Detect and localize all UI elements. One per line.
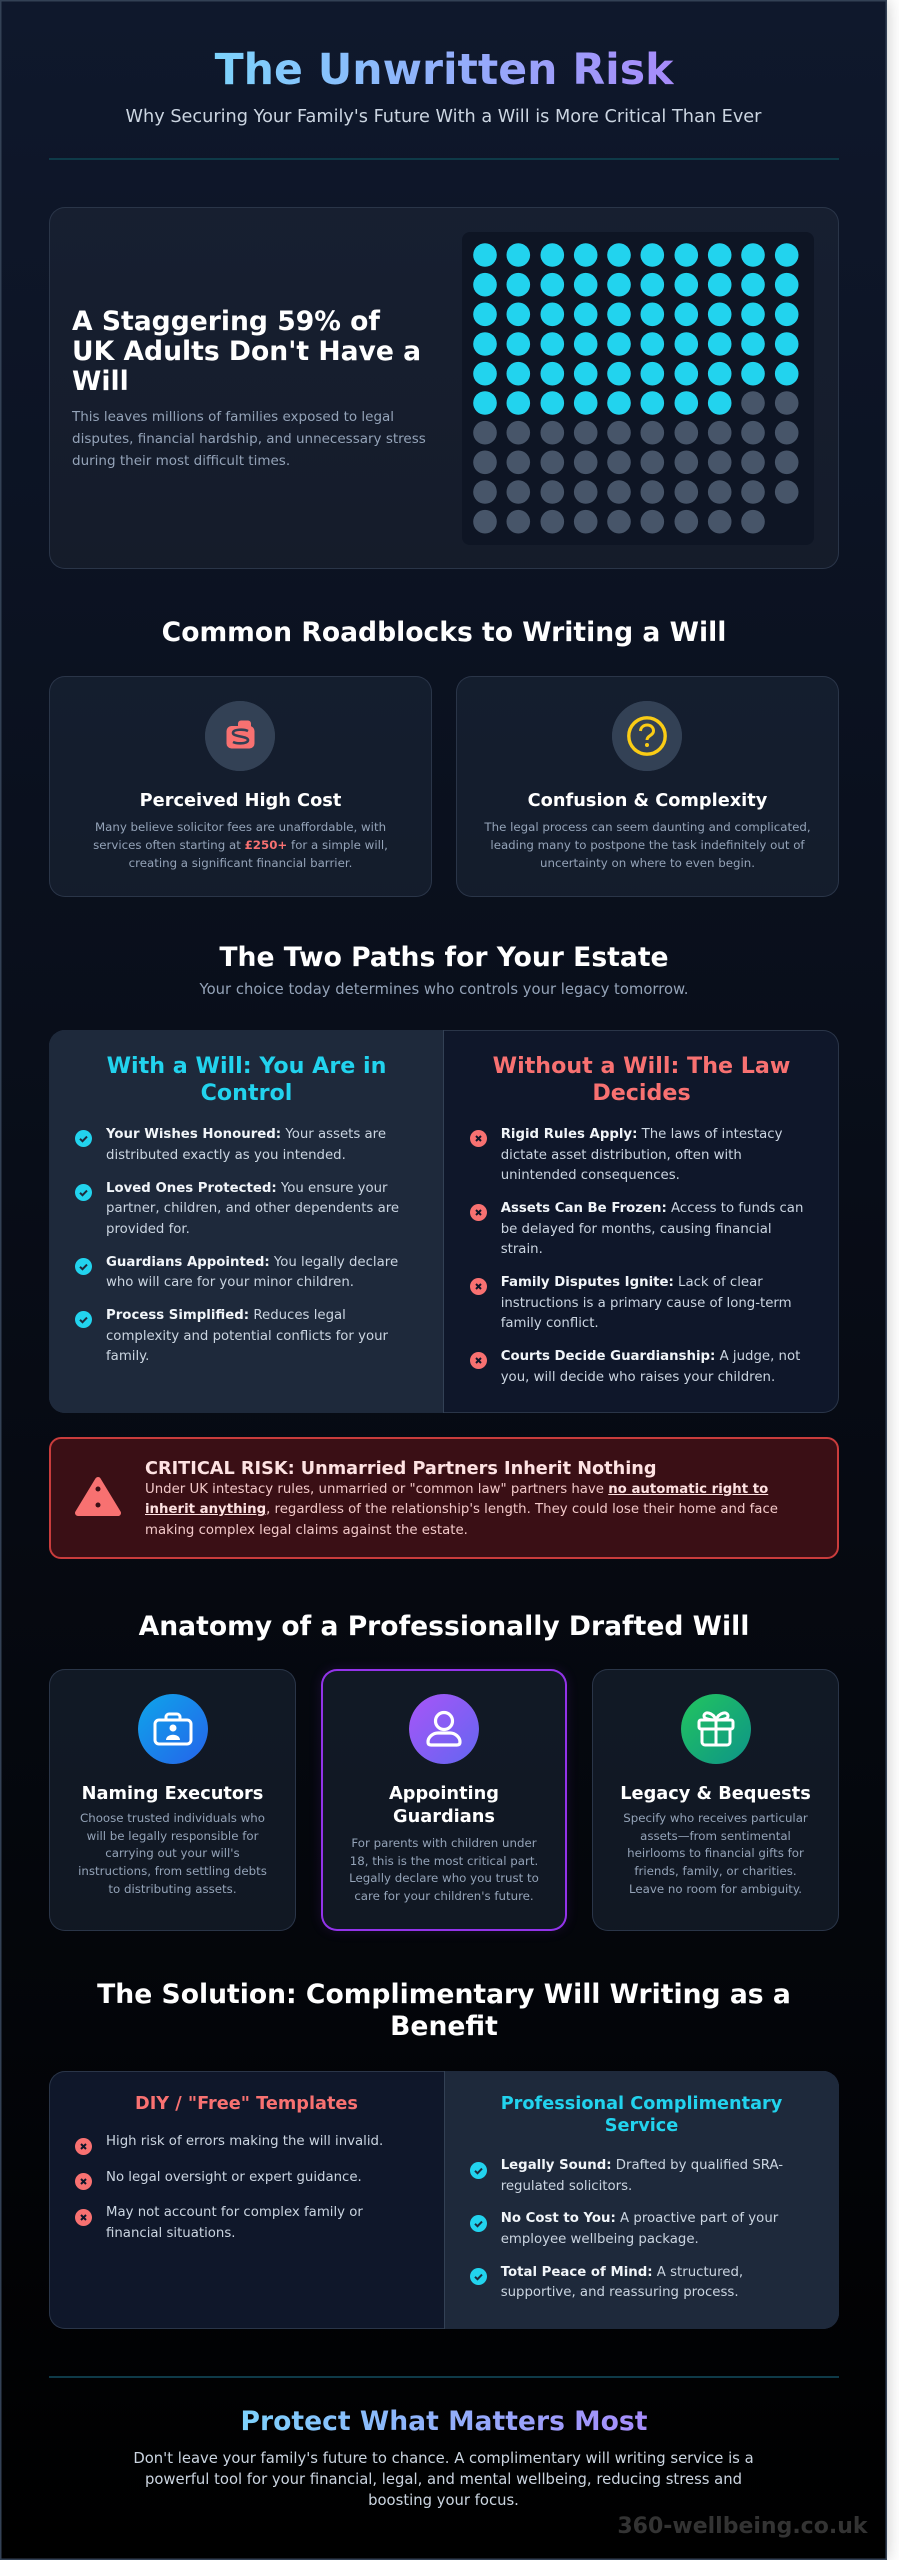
item: process simplified: complexity and potential conflicts for your — [106, 1329, 388, 1344]
card text — [349, 1836, 539, 1903]
card text: Specify who receives particular — [623, 1811, 808, 1825]
item: process simplified — [106, 1308, 388, 1364]
column: DIY templates — [75, 2094, 383, 2241]
item: family disputes: family conflict. — [501, 1316, 599, 1331]
item: family disputes — [501, 1275, 792, 1331]
statistic heading: UK Adults Don't Have a — [72, 336, 421, 366]
callout text: making complex legal claims against the estate. — [145, 1523, 468, 1538]
callout text: Under UK intestacy rules, unmarried or "common law" partners have no automatic right to — [145, 1482, 768, 1496]
item: assets frozen: strain. — [501, 1242, 543, 1257]
item: process simplified: family. — [106, 1349, 149, 1364]
card text: assets—from sentimental — [640, 1829, 791, 1843]
heading: the solution: Benefit — [390, 2011, 498, 2042]
column: with a will — [49, 1030, 444, 1413]
icon: check — [75, 1184, 92, 1201]
statistic heading: A Staggering 59% of — [72, 306, 380, 336]
column heading: Professional Complimentary — [501, 2094, 782, 2114]
item: complex situations: May not account for complex family or — [106, 2205, 363, 2220]
icon: cross — [470, 1130, 487, 1147]
heading: the solution — [97, 1979, 791, 2042]
footer heading: Protect What Matters Most — [241, 2406, 647, 2437]
item: peace of mind — [501, 2263, 743, 2304]
item: assets frozen: be delayed for months, causing financial — [501, 1222, 772, 1237]
card title: Naming Executors — [82, 1784, 263, 1804]
card text — [623, 1811, 808, 1896]
icon: check — [470, 2162, 487, 2179]
card title: Perceived High Cost — [140, 791, 341, 811]
footer text — [0, 2449, 887, 2512]
column heading: Control — [201, 1080, 292, 1106]
card text: care for your children's future. — [354, 1889, 534, 1903]
footer text: Don't leave your family's future to chance. A complimentary will writing service is a — [133, 2450, 754, 2467]
card text: Choose trusted individuals who — [80, 1811, 265, 1825]
statistic description: This leaves millions of families exposed to legal — [72, 409, 394, 425]
item: assets frozen — [500, 1201, 803, 1257]
callout heading: CRITICAL RISK: Unmarried Partners Inherit Nothing — [145, 1458, 657, 1478]
heading: two paths: The Two Paths for Your Estate — [219, 942, 669, 973]
card text: to distributing assets. — [108, 1882, 237, 1896]
heading: the solution: The Solution: Complimentary Will Writing as a — [97, 1979, 791, 2010]
item: complex situations — [106, 2205, 363, 2241]
icon: cross — [75, 2209, 92, 2226]
panel: naming executors — [49, 1669, 296, 1931]
icon: check — [470, 2215, 487, 2232]
chart: dot grid of 59 in 100 — [462, 232, 814, 534]
statistic description — [72, 409, 426, 469]
card title: Guardians — [393, 1806, 495, 1826]
card text: uncertainty on where to even begin. — [540, 856, 755, 870]
column heading — [107, 1053, 386, 1106]
panel: legacy and bequests — [592, 1669, 839, 1931]
item: family disputes: Family Disputes Ignite: Lack of clear — [501, 1275, 763, 1290]
item: no cost — [501, 2211, 778, 2247]
statistic description: during their most difficult times. — [72, 453, 290, 469]
card text: instructions, from settling debts — [78, 1864, 267, 1878]
panel: perceived high cost — [49, 676, 432, 897]
item: no cost: employee wellbeing package. — [501, 2232, 699, 2247]
item: loved ones protected: provided for. — [106, 1222, 190, 1237]
card text: Legally declare who you trust to — [349, 1871, 539, 1885]
statistic description: disputes, financial hardship, and unnecessary stress — [72, 431, 426, 447]
item: loved ones protected: Loved Ones Protected: You ensure your — [106, 1180, 388, 1196]
column heading: Service — [605, 2116, 678, 2136]
column heading — [501, 2094, 782, 2136]
card text — [93, 820, 388, 870]
icon: check — [75, 1311, 92, 1328]
item: wishes honoured — [106, 1127, 386, 1163]
panel: 59% statistic — [49, 207, 839, 569]
callout text — [145, 1482, 778, 1538]
card text: Leave no room for ambiguity. — [629, 1882, 802, 1896]
icon: gift — [680, 1694, 750, 1764]
item: loved ones protected — [106, 1180, 399, 1237]
card text: For parents with children under — [351, 1836, 537, 1850]
footer text: boosting your focus. — [368, 2492, 519, 2509]
footer text: powerful tool for your financial, legal, and mental wellbeing, reducing stress and — [145, 2471, 742, 2488]
item: peace of mind: supportive, and reassuring process. — [501, 2285, 739, 2300]
item: high risk: High risk of errors making the will invalid. — [106, 2134, 383, 2149]
card text: leading many to postpone the task indefinitely out of — [490, 838, 805, 852]
column: professional service — [444, 2071, 839, 2329]
card text: The legal process can seem daunting and complicated, — [484, 820, 811, 834]
panel: appointing guardians — [321, 1669, 567, 1931]
item: guardians appointed — [106, 1254, 398, 1290]
item: courts decide: you, will decide who raises your children. — [501, 1370, 775, 1385]
icon: money jar — [205, 701, 275, 771]
column: without a will — [470, 1053, 803, 1385]
icon: cross — [75, 2173, 92, 2190]
card text — [484, 820, 811, 870]
statistic heading: Will — [72, 366, 129, 396]
card title — [389, 1784, 499, 1826]
item: courts decide — [501, 1349, 800, 1385]
watermark: 360-wellbeing.co.uk — [617, 2514, 868, 2539]
item: no cost: No Cost to You: A proactive part of your — [501, 2211, 778, 2226]
icon: question mark — [612, 701, 682, 771]
item: rigid rules: Rigid Rules Apply: The laws of intestacy — [501, 1127, 782, 1142]
item: legally sound: regulated solicitors. — [501, 2179, 632, 2194]
card title: Legacy & Bequests — [620, 1784, 811, 1804]
card text: Many believe solicitor fees are unaffordable, with — [95, 820, 386, 834]
item: wishes honoured: distributed exactly as you intended. — [106, 1148, 346, 1163]
icon: check — [75, 1258, 92, 1275]
item: rigid rules — [501, 1127, 782, 1183]
item: no oversight: No legal oversight or expert guidance. — [106, 2170, 362, 2185]
card text: services often starting at £250+ for a simple will, — [93, 838, 388, 852]
icon: warning triangle — [75, 1477, 121, 1516]
item: rigid rules: dictate asset distribution, often with — [501, 1148, 742, 1163]
icon: cross — [470, 1204, 487, 1221]
icon: cross — [470, 1278, 487, 1295]
item: process simplified: Process Simplified: Reduces legal — [106, 1308, 346, 1323]
item: rigid rules: unintended consequences. — [501, 1168, 680, 1183]
card text: heirlooms to financial gifts for — [627, 1846, 804, 1860]
column heading: DIY / "Free" Templates — [135, 2094, 358, 2114]
card text: carrying out your will's — [105, 1846, 240, 1860]
card title: Confusion & Complexity — [528, 791, 767, 811]
subheading: two paths: Your choice today determines who controls your legacy tomorrow. — [200, 981, 688, 998]
column heading: Decides — [592, 1080, 691, 1106]
item: loved ones protected: partner, children, and other dependents are — [106, 1201, 399, 1216]
panel: DIY vs professional service — [49, 2071, 839, 2329]
heading: anatomy: Anatomy of a Professionally Drafted Will — [139, 1611, 749, 1642]
card text: friends, family, or charities. — [634, 1864, 797, 1878]
statistic heading — [72, 306, 421, 396]
item: guardians appointed: who will care for your minor children. — [106, 1275, 354, 1290]
header subtitle: Why Securing Your Family's Future With a Will is More Critical Than Ever — [126, 107, 761, 127]
card text: 18, this is the most critical part. — [350, 1854, 538, 1868]
item: legally sound — [501, 2158, 783, 2194]
item: peace of mind: Total Peace of Mind: A structured, — [501, 2265, 743, 2280]
item: legally sound: Legally Sound: Drafted by qualified SRA- — [501, 2158, 783, 2173]
callout: critical risk — [49, 1437, 839, 1559]
item: guardians appointed: Guardians Appointed: You legally declare — [106, 1254, 398, 1270]
item: courts decide: Courts Decide Guardianship: A judge, not — [501, 1349, 800, 1364]
icon: guardian person — [409, 1694, 479, 1764]
card text — [78, 1811, 267, 1896]
column heading — [493, 1053, 790, 1106]
icon: executor badge — [138, 1694, 208, 1764]
card text: will be legally responsible for — [87, 1829, 258, 1843]
callout text: inherit anything, regardless of the relationship's length. They could lose their home and face — [145, 1502, 778, 1517]
icon: check — [470, 2268, 487, 2285]
item: complex situations: financial situations. — [106, 2226, 236, 2241]
icon: check — [75, 1130, 92, 1147]
item: family disputes: instructions is a primary cause of long-term — [501, 1296, 792, 1311]
panel: confusion and complexity — [456, 676, 839, 897]
column heading: Without a Will: The Law — [493, 1053, 790, 1079]
item: assets frozen: Assets Can Be Frozen: Access to funds can — [501, 1201, 803, 1216]
item: wishes honoured: Your Wishes Honoured: Your assets are — [106, 1127, 386, 1142]
header title: The Unwritten Risk — [215, 45, 673, 95]
column heading: With a Will: You Are in — [107, 1053, 386, 1079]
card text: creating a significant financial barrier. — [129, 856, 352, 870]
heading: roadblocks: Common Roadblocks to Writing a Will — [162, 617, 726, 648]
icon: cross — [75, 2138, 92, 2155]
panel: comparison with and without a will — [49, 1030, 839, 1413]
card title: Appointing — [389, 1784, 499, 1804]
icon: cross — [470, 1352, 487, 1369]
